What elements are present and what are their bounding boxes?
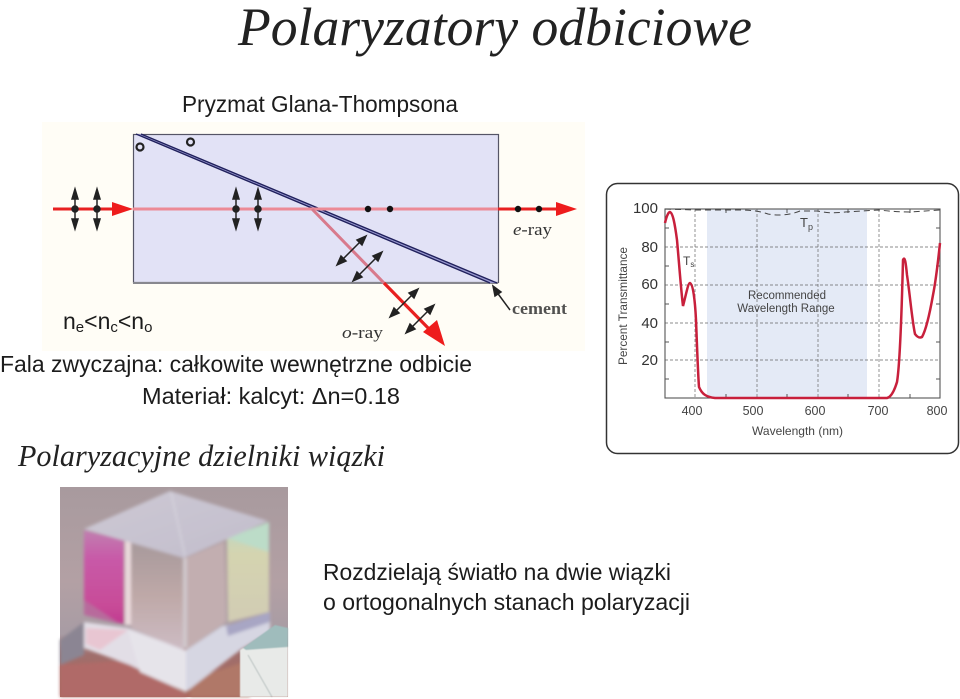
- image: beam splitter cube: [60, 487, 288, 697]
- label: cement: cement: [512, 299, 567, 318]
- y axis title: Percent Transmittance: [616, 247, 630, 365]
- y axis numbers: 80: [641, 239, 658, 256]
- y axis numbers: 20: [641, 352, 658, 369]
- text: refractive index relation: <n: [84, 308, 110, 334]
- chart frame: [606, 184, 958, 454]
- polarization vertical arrows: [72, 189, 261, 229]
- arrow: cement pointer: [493, 286, 510, 310]
- heading: Glan-Thompson prism: Pryzmat Glana-Thompsona: [182, 91, 458, 117]
- vertical white edge: [125, 541, 131, 625]
- y axis numbers: [633, 200, 658, 369]
- central faces: [131, 544, 184, 650]
- x axis numbers: 400: [682, 404, 702, 418]
- optic axis symbols: [136, 138, 194, 150]
- text: ordinary ray: Fala zwyczajna: całkowite wewnętrzne odbicie: [0, 351, 472, 377]
- x axis title: Wavelength (nm): [752, 424, 843, 438]
- polarization diagonal arrows: [337, 236, 434, 333]
- yellow-green right face: [227, 524, 269, 622]
- label: Tp: T: [800, 215, 808, 230]
- panel: Glan-Thompson prism diagram: [42, 122, 585, 351]
- recommended range band: [707, 209, 867, 398]
- label: o-ray: o-ray: [342, 323, 384, 342]
- plot axes: [665, 209, 940, 398]
- y axis numbers: 40: [641, 315, 658, 332]
- x axis numbers: 800: [927, 404, 947, 418]
- grid lines: [665, 209, 940, 398]
- label: Ts: s: [690, 260, 694, 269]
- heading: polarizing beam splitters: Polaryzacyjne dzielniki wiązki: [17, 438, 385, 473]
- text: refractive index relation: o: [144, 319, 152, 336]
- x axis numbers: 600: [805, 404, 825, 418]
- text: material: Materiał: kalcyt: Δn=0.18: [142, 383, 400, 409]
- label: e-ray: e-ray: [513, 220, 553, 239]
- x axis numbers: 700: [868, 404, 888, 418]
- axis ticks: [665, 209, 940, 398]
- panel: transmittance chart: [606, 184, 958, 454]
- text: refractive index relation: <n: [118, 308, 144, 334]
- cube bottom reflective faces: [84, 622, 186, 692]
- second prism corner: [240, 625, 288, 697]
- text: beam splitter description: o ortogonalnych stanach polaryzacji: [323, 589, 690, 615]
- range label: Recommended: [748, 290, 826, 302]
- x axis numbers: 500: [743, 404, 763, 418]
- y axis numbers: 60: [641, 276, 658, 293]
- o-ray beam: [312, 209, 445, 346]
- text: beam splitter description: Rozdzielają światło na dwie wiązki: [323, 559, 671, 585]
- polarization dots: [365, 206, 542, 212]
- text: refractive index relation: c: [110, 319, 118, 336]
- x axis numbers: [682, 404, 947, 418]
- input and e-ray beam: [53, 202, 577, 216]
- left lower shadow: [60, 622, 84, 665]
- y axis numbers: 100: [633, 200, 658, 217]
- cement layer: [136, 134, 497, 283]
- top face: [84, 491, 268, 558]
- label: Ts: T: [683, 254, 690, 268]
- prism body: [134, 134, 498, 282]
- label: Tp: p: [808, 222, 813, 232]
- magenta left face: [84, 530, 124, 624]
- text: refractive index relation: e: [76, 319, 84, 336]
- diagram background: [42, 122, 585, 351]
- range label: Wavelength Range: [737, 303, 835, 315]
- text: beam splitter description: [323, 559, 690, 615]
- Ts red curve: [665, 212, 940, 398]
- Tp dashed curve: [665, 209, 940, 215]
- text: refractive index relation: n: [63, 308, 76, 334]
